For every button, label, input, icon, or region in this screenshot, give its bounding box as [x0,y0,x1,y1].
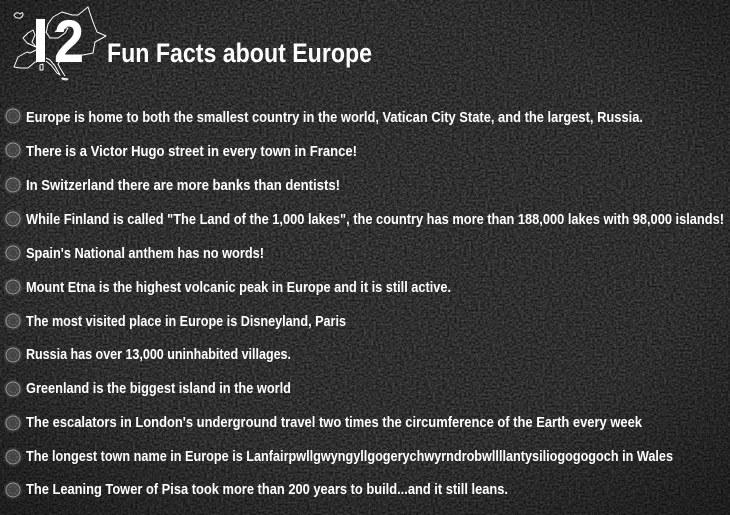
title: Fun Facts about Europe [107,38,372,68]
fact 9: Greenland is the biggest island in the world [26,380,291,397]
number 12 [36,19,82,62]
icon: Europe map outline [14,7,106,80]
fact 6: Mount Etna is the highest volcanic peak in Europe and it is still active. [26,279,451,296]
number 12: 1 [21,8,54,75]
fact 2: There is a Victor Hugo street in every town in France! [26,143,357,160]
fact 10: The escalators in London's underground travel two times the circumference of the Earth every week [26,414,643,431]
fact 3: In Switzerland there are more banks than dentists! [26,177,340,194]
fact 8: Russia has over 13,000 uninhabited villages. [26,346,291,363]
fact 1: Europe is home to both the smallest country in the world, Vatican City State, and the largest, Russia. [26,109,643,126]
fact 5: Spain's National anthem has no words! [26,245,264,262]
fact 12: The Leaning Tower of Pisa took more than 200 years to build...and it still leans. [26,481,508,498]
number 12: 2 [54,8,84,75]
fact 7: The most visited place in Europe is Disneyland, Paris [26,313,346,330]
